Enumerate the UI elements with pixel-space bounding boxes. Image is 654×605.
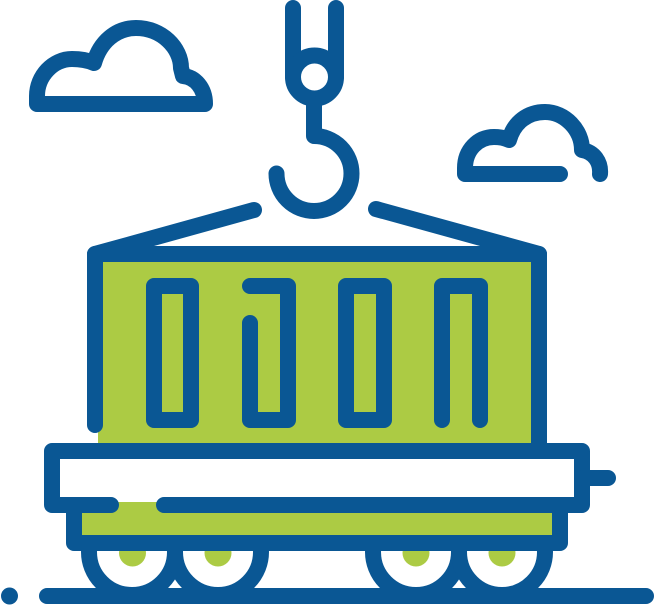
container frame bbox=[95, 254, 539, 449]
coupler bbox=[582, 470, 608, 486]
wheel 3 bbox=[373, 509, 459, 595]
container green fill bbox=[98, 254, 534, 449]
container door 4 bbox=[442, 286, 480, 420]
rail track bbox=[1, 588, 646, 604]
icon: crane hook bbox=[276, 8, 352, 211]
flatbed deck bbox=[60, 459, 574, 502]
car lower body bbox=[82, 502, 552, 536]
container door 3 bbox=[346, 286, 384, 420]
wheel 1 bbox=[89, 509, 175, 595]
shipping container bbox=[95, 254, 539, 449]
wheel 4 bbox=[459, 509, 545, 595]
icon: small cloud bbox=[465, 112, 600, 174]
rail car bbox=[52, 451, 608, 543]
icon: large cloud bbox=[37, 28, 205, 104]
lifting cables bbox=[95, 209, 539, 254]
container door 1 bbox=[154, 286, 191, 420]
wheels bbox=[89, 509, 545, 595]
container door 2 bbox=[250, 286, 288, 420]
wheel 2 bbox=[175, 509, 261, 595]
